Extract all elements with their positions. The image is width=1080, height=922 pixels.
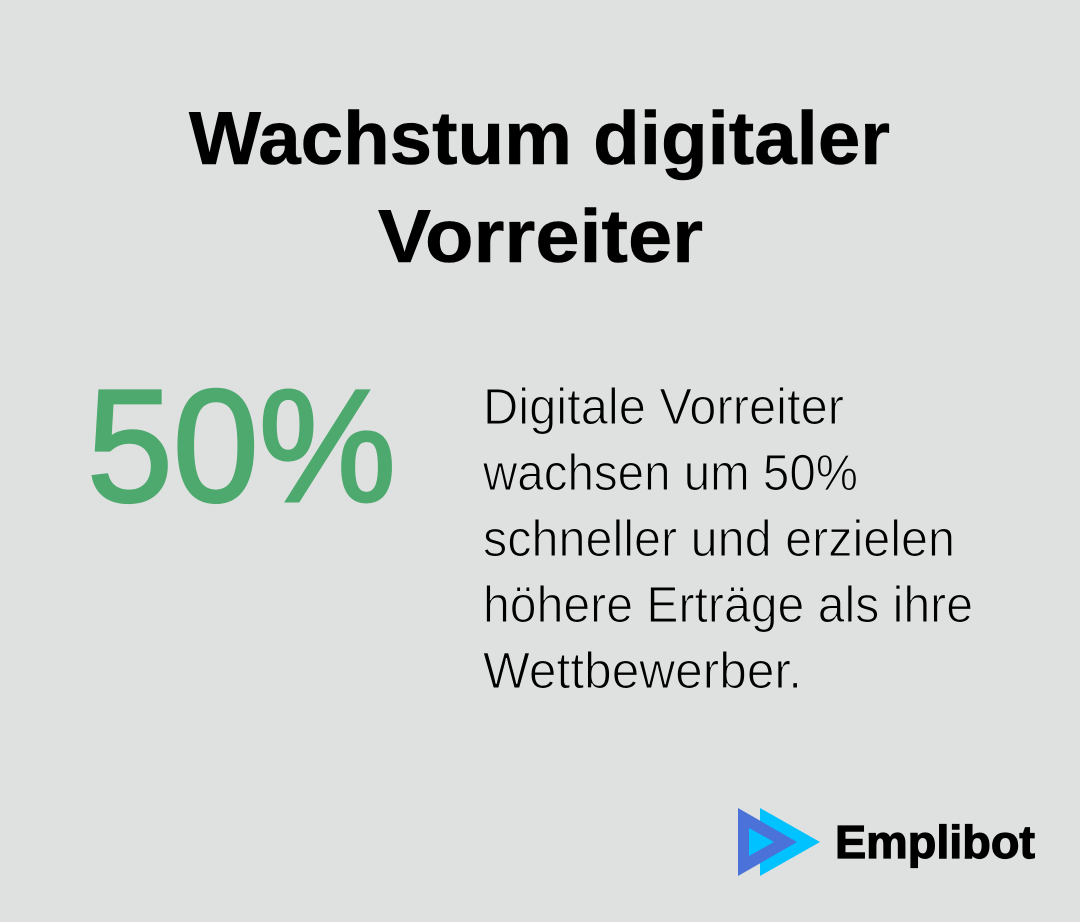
title: Vorreiter (378, 194, 703, 278)
description text (482, 378, 973, 699)
logo: Emplibot (738, 808, 1035, 876)
description text: Wettbewerber. (483, 642, 802, 699)
logo wordmark: Emplibot (835, 816, 1035, 868)
description text: Digitale Vorreiter (483, 378, 844, 435)
description text: wachsen um 50% (482, 444, 858, 501)
icon: play triangles (738, 808, 820, 876)
big statistic: 50%: 50% (87, 356, 396, 535)
title: Wachstum digitaler (189, 96, 890, 180)
title (189, 96, 890, 278)
description text: schneller und erzielen (483, 510, 955, 567)
description text: höhere Erträge als ihre (483, 576, 973, 633)
